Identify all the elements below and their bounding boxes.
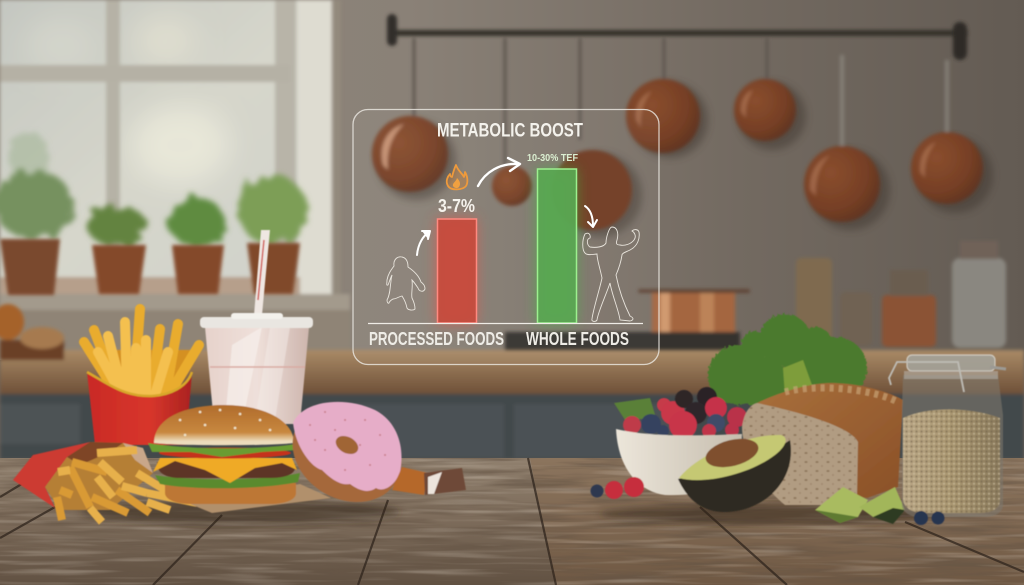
arrow: red bar to green bar [478, 158, 520, 186]
icon: flame [447, 165, 467, 189]
wooden table [0, 458, 1024, 585]
arrow: person to red bar [417, 231, 430, 255]
processed foods group [13, 230, 466, 522]
axis line [368, 322, 643, 324]
icon: french fries carton [84, 309, 199, 445]
value: 3-7%: 3-7% [438, 196, 475, 216]
icon: muscular figure outline [583, 227, 639, 321]
wall [0, 0, 1024, 360]
icon: bowl of berries [614, 387, 747, 495]
window [0, 0, 350, 355]
panel: metabolic boost [353, 110, 659, 364]
label: processed foods: PROCESSED FOODS [369, 329, 504, 349]
icon: pink donut [275, 385, 419, 521]
icon: chocolate bar [392, 467, 466, 495]
bar: processed foods [437, 219, 476, 323]
icon: bread loaf [742, 383, 903, 505]
counter [0, 304, 1024, 460]
kitchen background [0, 0, 1024, 460]
icon: drink cup [200, 230, 313, 424]
label: whole foods: WHOLE FOODS [526, 329, 629, 349]
icon: broccoli [708, 314, 867, 408]
icon: burger [148, 405, 331, 513]
back shelf items [505, 241, 1006, 362]
arrow: green bar to muscular figure [585, 206, 597, 227]
icon: avocado half [678, 434, 791, 512]
rail and hanging pans [372, 14, 993, 237]
potted plants [0, 130, 306, 295]
title: METABOLIC BOOST [437, 120, 583, 142]
icon: loose berries [590, 477, 644, 499]
icon: avocado slices [815, 487, 905, 524]
whole foods group [590, 314, 1006, 525]
bar: whole foods [537, 169, 576, 323]
glass panel frame [353, 110, 659, 364]
icon: blueberries [914, 511, 944, 525]
icon: glass jar of quinoa [889, 355, 1006, 517]
value: 10-30% TEF: 10-30% TEF [527, 153, 578, 164]
icon: spilled fries [13, 442, 197, 522]
icon: overweight figure outline [387, 257, 425, 310]
